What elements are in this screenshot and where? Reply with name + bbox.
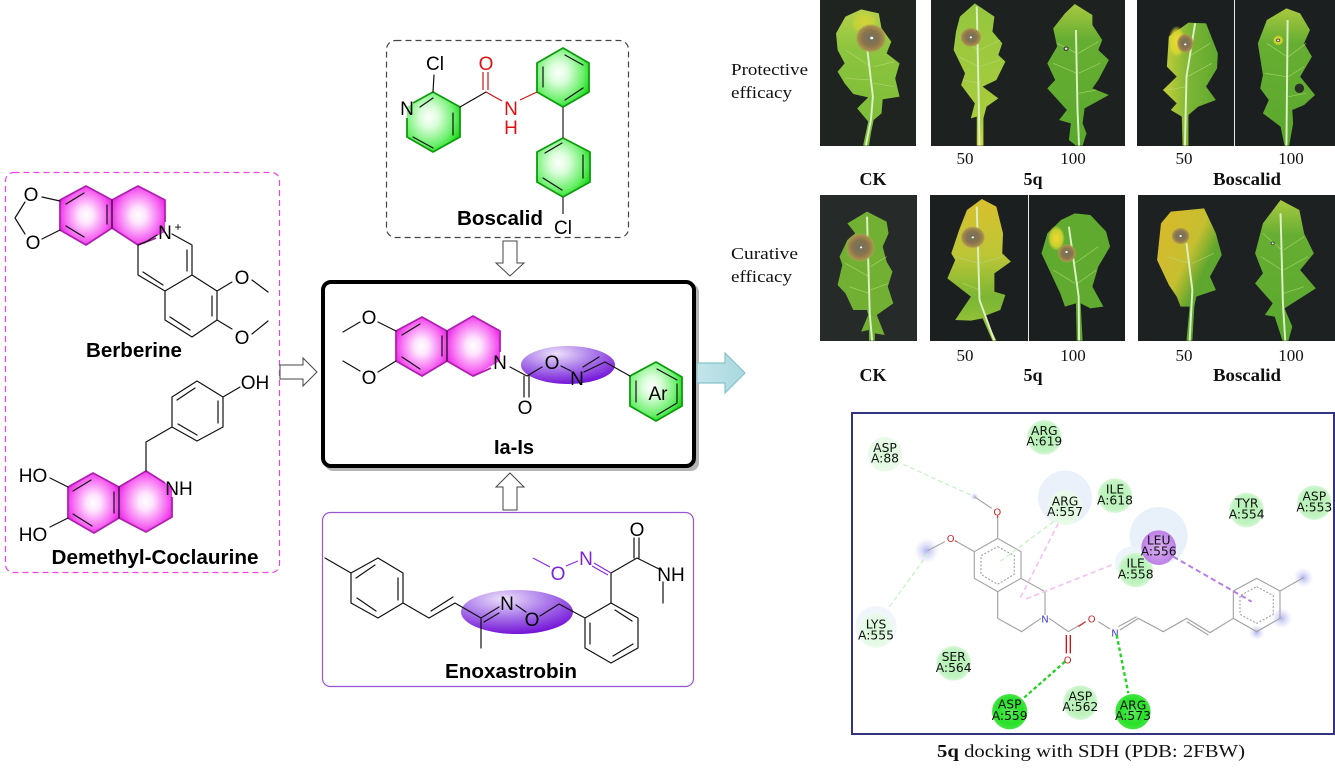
- structure: Demethyl-Coclaurine: [19, 373, 269, 546]
- photo: 5q 50 leaf: [947, 199, 1011, 341]
- label: Ia-Is: Ia-Is: [494, 437, 534, 459]
- ligand atoms: O: [947, 534, 955, 545]
- residues: A:619: [1026, 435, 1062, 449]
- ligand atoms: O: [993, 507, 1001, 518]
- ligand atoms: O: [1064, 656, 1072, 667]
- ligand atoms: [947, 507, 1119, 667]
- structure: lead compound: N: [493, 353, 507, 374]
- residues: A:555: [858, 628, 894, 642]
- residues: ARG: [1031, 424, 1058, 438]
- labels: curative concentrations: CK: [860, 365, 886, 385]
- photo: CK leaf: [836, 9, 900, 146]
- residues: A:618: [1097, 493, 1133, 507]
- structure: lead compound: Ar: [648, 384, 668, 405]
- structure: lead compound: O: [518, 398, 532, 419]
- structure: Berberine: +: [174, 220, 182, 234]
- panel: docking diagram: [852, 413, 1334, 734]
- arrow: natural products to lead: [280, 358, 317, 386]
- photo: Boscalid 50 leaf: [1163, 23, 1218, 146]
- residues: A:557: [1047, 505, 1083, 519]
- structure: Boscalid: N: [400, 99, 414, 120]
- structure: lead compound: O: [362, 368, 376, 389]
- labels: protective concentrations: 5q: [1023, 169, 1043, 189]
- residues: A:554: [1229, 508, 1265, 522]
- residues: A:562: [1062, 700, 1098, 714]
- structure: Enoxastrobin: [325, 520, 685, 663]
- structure: Berberine: [15, 185, 268, 349]
- structure: Demethyl-Coclaurine: HO: [19, 525, 47, 546]
- residues: [858, 420, 1332, 729]
- residues: LYS: [866, 617, 886, 631]
- text: curative efficacy: Curative: [731, 244, 798, 263]
- structure: Boscalid: N: [504, 99, 518, 120]
- residues: ASP: [1068, 689, 1093, 703]
- structure: Demethyl-Coclaurine: HO: [19, 466, 47, 487]
- label: Enoxastrobin: Enoxastrobin: [445, 661, 577, 683]
- labels: curative concentrations: [860, 346, 1304, 385]
- labels: protective concentrations: 50: [956, 149, 974, 168]
- structure: Boscalid: Cl: [554, 218, 572, 239]
- photo: 5q 100 leaf: [1041, 213, 1110, 341]
- label: Boscalid: Boscalid: [457, 208, 543, 230]
- structure: lead compound: O: [545, 353, 559, 374]
- label: Berberine: Berberine: [86, 340, 182, 362]
- residues: ILE: [1127, 557, 1145, 571]
- structure: Demethyl-Coclaurine: NH: [165, 479, 193, 500]
- structure: lead compound: N: [570, 369, 584, 390]
- structure: Berberine: O: [235, 328, 249, 349]
- ligand atoms: N: [1111, 628, 1119, 639]
- structure: Berberine: O: [235, 268, 249, 289]
- text: protective efficacy: Protective: [731, 60, 808, 79]
- labels: protective concentrations: Boscalid: [1213, 169, 1281, 189]
- photo: CK leaf: [838, 212, 893, 341]
- structure: Enoxastrobin: O: [525, 610, 539, 631]
- structure: Boscalid: Cl: [426, 54, 444, 75]
- ellipse: oxime ether: [461, 590, 573, 634]
- panel: Enoxastrobin: [322, 512, 694, 686]
- residues: ASP: [1302, 489, 1327, 503]
- structure: Boscalid: H: [504, 118, 518, 139]
- panel: natural products: [6, 172, 280, 572]
- ligand atoms: O: [1088, 615, 1096, 626]
- ligand atoms: N: [1041, 615, 1049, 626]
- structure: Enoxastrobin: N: [500, 594, 514, 615]
- labels: curative concentrations: 50: [1176, 346, 1192, 365]
- photo: 5q 100 leaf: [1047, 4, 1109, 146]
- labels: protective concentrations: [860, 149, 1304, 189]
- panel: lead structure Ia-Is: [323, 282, 699, 471]
- structure: Enoxastrobin: O: [551, 564, 565, 585]
- photo: Boscalid 50 leaf: [1157, 208, 1222, 341]
- residues: A:564: [936, 661, 972, 675]
- text: protective efficacy: [731, 60, 808, 102]
- interactions: [888, 464, 1252, 698]
- residues: LEU: [1147, 534, 1171, 548]
- residues: ASP: [998, 698, 1022, 712]
- structure: lead compound: [343, 308, 682, 421]
- text: curative efficacy: [731, 244, 798, 286]
- text: curative efficacy: efficacy: [731, 267, 793, 286]
- residues: ARG: [1120, 698, 1146, 712]
- structure: Boscalid: [400, 48, 590, 239]
- structure: Enoxastrobin: NH: [657, 565, 685, 586]
- panel: protective efficacy leaf photos: [820, 0, 1335, 146]
- arrow: Boscalid to lead: [496, 241, 524, 276]
- labels: curative concentrations: 100: [1060, 346, 1086, 365]
- residues: ASP: [873, 441, 897, 455]
- structure: Berberine: O: [24, 185, 38, 206]
- labels: protective concentrations: CK: [860, 169, 886, 189]
- panel: Boscalid: [386, 40, 628, 239]
- residues: SER: [942, 650, 966, 664]
- photo: Boscalid 100 leaf: [1258, 8, 1315, 146]
- text: protective efficacy: efficacy: [731, 83, 793, 102]
- residues: TYR: [1234, 497, 1259, 511]
- labels: curative concentrations: 100: [1278, 346, 1304, 365]
- caption: docking: 5q docking with SDH (PDB: 2FBW): [937, 741, 1245, 762]
- labels: protective concentrations: 50: [1176, 149, 1192, 168]
- residues: A:553: [1296, 500, 1332, 514]
- labels: protective concentrations: 100: [1060, 149, 1086, 168]
- labels: curative concentrations: 50: [956, 346, 974, 365]
- structure: Demethyl-Coclaurine: OH: [241, 373, 269, 394]
- residues: A:573: [1115, 709, 1151, 723]
- label: Demethyl-Coclaurine: Demethyl-Coclaurine: [52, 547, 258, 569]
- residues: A:559: [992, 709, 1028, 723]
- labels: curative concentrations: 5q: [1023, 365, 1043, 385]
- structure: Enoxastrobin: N: [579, 549, 593, 570]
- labels: curative concentrations: Boscalid: [1213, 365, 1281, 385]
- residues: A:88: [871, 452, 899, 466]
- structure: Enoxastrobin: O: [630, 520, 644, 541]
- photo: Boscalid 100 leaf: [1255, 200, 1316, 341]
- ellipse: oxime ether: [521, 346, 615, 384]
- arrow: lead to biological results: [697, 353, 745, 393]
- structure: Berberine: N: [158, 223, 172, 244]
- residues: A:558: [1118, 568, 1154, 582]
- arrow: Enoxastrobin to lead: [496, 473, 524, 510]
- structure: Berberine: O: [26, 233, 40, 254]
- structure: lead compound: O: [362, 308, 376, 329]
- photo: 5q 50 leaf: [954, 3, 1005, 146]
- structure: Boscalid: O: [479, 54, 493, 75]
- labels: protective concentrations: 100: [1278, 149, 1304, 168]
- residues: A:556: [1141, 545, 1177, 559]
- residues: ILE: [1106, 482, 1124, 496]
- panel: curative efficacy leaf photos: [820, 195, 1335, 341]
- ligand 5q: [928, 497, 1303, 653]
- residues: ARG: [1052, 494, 1078, 508]
